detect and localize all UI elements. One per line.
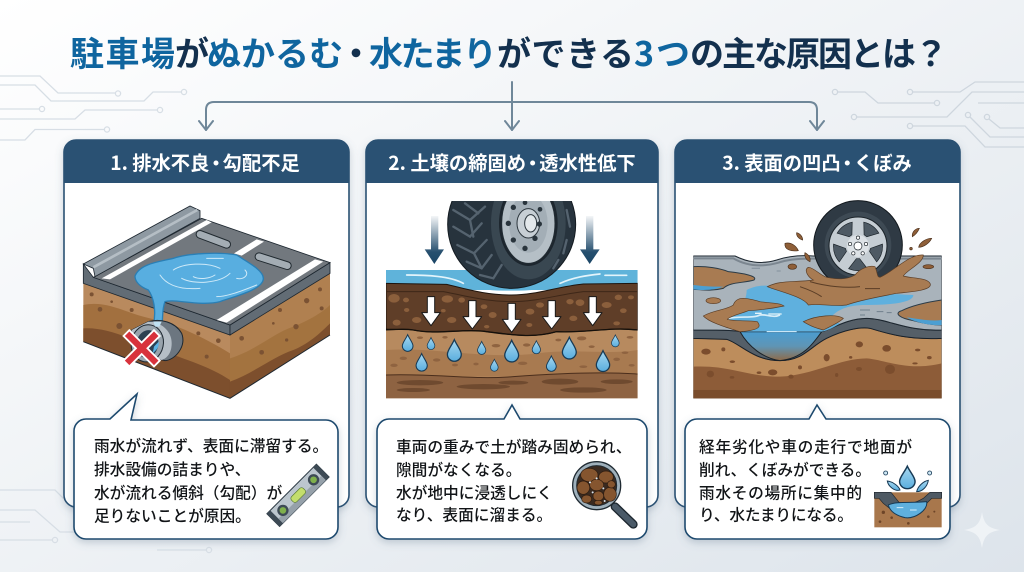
- callout 1: [74, 394, 338, 539]
- callout 1 text: 足りないことが原因。: [94, 504, 251, 526]
- icon: sparkle watermark: [964, 512, 1000, 548]
- callout 2 text: 車両の重みで土が踏み固められ、: [396, 434, 631, 458]
- callout 3 text: り、水たまりになる。: [699, 502, 853, 526]
- panel 3 header bar: [675, 140, 960, 183]
- callout 1 text: [94, 434, 328, 526]
- icon: red X on pipe: [129, 336, 154, 361]
- callout 3: [685, 405, 950, 539]
- panel 1 heading: 1. 排水不良・勾配不足: [110, 148, 300, 176]
- panel 2 heading: 2. 土壌の締固め・透水性低下: [388, 148, 636, 176]
- icon: mud droplets: [785, 228, 934, 269]
- title: ・: [339, 27, 373, 76]
- callout 2 text: なり、表面に溜まる。: [396, 502, 552, 526]
- panel 3 card: [675, 140, 960, 507]
- illustration: tyre compacting soil: [386, 201, 638, 398]
- icon: spirit level: [267, 464, 329, 526]
- illustration: parking lot block with puddle and clogged pipe: [83, 206, 330, 398]
- callout 2 text: 水が地中に浸透しにく: [396, 480, 553, 504]
- panel 3 heading: 3. 表面の凹凸・くぼみ: [722, 148, 912, 176]
- callout 3 text: 経年劣化や車の走行で地面が: [699, 434, 912, 458]
- arrows: bracket branching to three panels: [199, 82, 824, 130]
- callout 2 text: 隙間がなくなる。: [396, 458, 522, 480]
- title: が: [175, 27, 209, 76]
- title: ができる: [497, 27, 634, 76]
- title: 水たまり: [369, 27, 497, 76]
- callout 3 text: 削れ、くぼみができる。: [699, 458, 871, 480]
- panel: 2 soil compaction: [366, 140, 658, 539]
- title: 駐車場: [70, 27, 175, 76]
- icon: wheel: [814, 201, 902, 289]
- panel: 3 uneven surface: [675, 140, 960, 539]
- panel 2 header bar: [366, 140, 658, 183]
- panel 1 card: [64, 140, 349, 507]
- callout 3 text: [699, 434, 912, 526]
- callout 2 text: [396, 434, 631, 526]
- title: ぬかるむ: [207, 27, 343, 76]
- title: 3つ: [634, 27, 690, 76]
- icon: downward pressure arrows: [425, 216, 600, 264]
- callout 1 text: 水が流れる傾斜（勾配）が: [94, 480, 283, 504]
- title: の主な原因とは？: [690, 27, 948, 76]
- callout 3 text: 雨水その場所に集中的: [699, 480, 862, 504]
- callout 2: [377, 405, 647, 539]
- icon: magnifier over compacted soil: [573, 462, 633, 524]
- icon: tyre pressing down: [447, 201, 576, 289]
- callout 1 text: 排水設備の詰まりや、: [94, 457, 250, 480]
- icon: white compaction arrows: [422, 297, 602, 332]
- panel: 1 drainage: [64, 140, 349, 539]
- panel 1 header bar: [64, 140, 349, 183]
- icon: water droplets in soil: [402, 335, 619, 371]
- title: [70, 27, 948, 76]
- illustration: tyre splashing in pothole: [693, 201, 942, 398]
- icon: mud splash: [767, 255, 930, 305]
- panel 2 card: [366, 140, 658, 507]
- callout 1 text: 雨水が流れず、表面に滞留する。: [94, 434, 328, 456]
- icon: pothole with water drop: [874, 466, 942, 527]
